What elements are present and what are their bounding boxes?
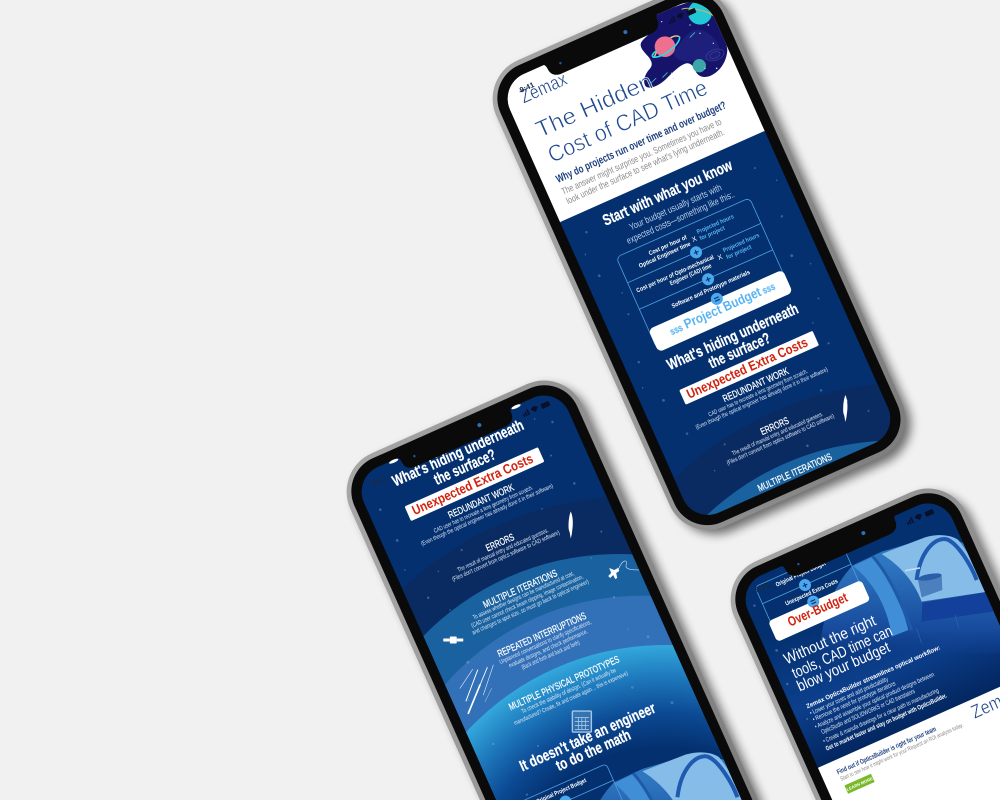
row 1: for project — [699, 225, 726, 242]
product list: • Analyze and assemble your optical product designs between — [814, 671, 936, 731]
galaxy swirl — [706, 48, 724, 62]
section: interruptions: REPEATED INTERRUPTIONS — [496, 611, 588, 660]
dome rib — [872, 556, 912, 630]
cylinder top — [917, 572, 942, 582]
camera lens — [861, 530, 866, 536]
tether — [618, 561, 640, 570]
white footer — [813, 675, 1000, 800]
icon: astronaut — [608, 561, 640, 579]
notch highlights — [388, 403, 521, 465]
meteors — [650, 33, 695, 84]
phone: right, over-budget screen — [717, 466, 1000, 800]
lower ribs — [917, 615, 959, 643]
stars — [369, 412, 713, 800]
phone bezel — [486, 0, 912, 537]
notch — [392, 404, 522, 474]
result panel — [648, 270, 793, 352]
result panel — [768, 580, 870, 642]
equals circle: = — [712, 294, 722, 306]
space blob illustration — [639, 1, 727, 88]
plus circle: + — [800, 580, 810, 592]
original budget: Original Project Budget — [775, 560, 827, 589]
band: errors — [674, 384, 890, 515]
clock: 9:41 — [518, 80, 536, 95]
screen — [508, 2, 890, 515]
budget box — [753, 546, 870, 642]
screen — [138, 288, 1000, 800]
row 1: Projected hours — [696, 213, 736, 236]
section: prototypes: MULTIPLE PHYSICAL PROTOTYPES — [507, 654, 622, 713]
sensor dot — [797, 563, 800, 566]
section: iterations: To assess whether designs can be manufactured at cost, — [472, 570, 575, 621]
section: errors — [719, 398, 835, 467]
pink planet — [655, 36, 675, 57]
section: interruptions — [494, 610, 598, 679]
divider 1 — [628, 223, 761, 283]
divider 2 — [639, 250, 773, 309]
heading: math — [517, 700, 664, 788]
stars — [751, 597, 822, 722]
start text — [627, 184, 735, 244]
camera lens — [477, 422, 482, 428]
plus circle 2: + — [704, 274, 714, 286]
sensor dot — [559, 62, 562, 65]
result label: $$$ — [669, 323, 685, 337]
phone case — [333, 367, 773, 800]
teal moon — [688, 1, 712, 25]
box outline — [616, 198, 790, 349]
product list: • Lower your costs and add predictability — [809, 676, 890, 717]
status icons — [668, 7, 697, 24]
phone shadow — [341, 372, 778, 800]
banner: extra costs: Unexpected Extra Costs — [684, 335, 810, 402]
start line 1: Your budget usually starts with — [628, 182, 724, 233]
telescope dome — [581, 752, 761, 800]
navy section — [560, 131, 890, 515]
white header — [492, 0, 770, 225]
phone: top, title screen — [492, 0, 918, 541]
section: errors — [444, 514, 561, 583]
band: iterations — [259, 467, 977, 800]
section: redundant work: REDUNDANT WORK — [447, 482, 516, 521]
dome panel — [853, 557, 908, 637]
divider — [762, 564, 851, 604]
icon: rocket — [569, 511, 573, 538]
section: iterations — [462, 558, 590, 637]
telescope cylinder — [918, 575, 942, 597]
heading: math: to do the math — [553, 727, 633, 775]
section: errors: The result of manual entry and educated guesses. — [456, 527, 550, 574]
title line 2: Cost of CAD Time — [544, 74, 711, 168]
phone shadow — [487, 0, 924, 548]
ring front — [652, 37, 680, 57]
phone bezel — [340, 374, 766, 800]
section: redundant work: CAD user has to recreate a lens geometry from scratch. — [707, 368, 809, 418]
result label: Project Budget — [682, 284, 764, 332]
section: prototypes: manufactured? Create, fix and create again… this is expensive) — [513, 670, 629, 727]
section: errors: ERRORS — [484, 532, 516, 554]
extra costs: Unexpected Extra Costs — [784, 578, 840, 607]
status icons — [906, 508, 935, 525]
equals circle — [709, 291, 725, 307]
blob stars — [639, 12, 717, 79]
section: redundant work — [413, 468, 554, 548]
moon ring — [682, 8, 713, 16]
zemax logo: Zemax — [517, 69, 571, 108]
row 1: X — [691, 235, 699, 244]
row 2: X — [717, 254, 724, 262]
product list: • Create & manufa drawings for a clear path to manufacturing — [822, 687, 940, 745]
heading: hiding: the surface? — [706, 330, 773, 372]
heading: blow budget — [781, 608, 901, 696]
dome base — [922, 592, 1000, 622]
banner: extra costs: Unexpected Extra Costs — [410, 451, 535, 518]
start line 2: expected costs—something like this:. — [625, 189, 736, 247]
ring back — [654, 36, 679, 57]
phone bezel — [724, 482, 1000, 800]
title — [534, 77, 707, 161]
box outline — [755, 547, 862, 629]
section: iterations: and changes to spot size, so must go back to optical engineer) — [471, 578, 590, 637]
row 2: Cost per hour of Opto-mechanical — [635, 254, 715, 294]
equals circle: = — [809, 596, 819, 609]
section: redundant work — [688, 351, 829, 431]
heading: blow budget: tools, CAD time can — [790, 623, 895, 682]
navy background — [730, 488, 1000, 775]
plus circle 2 — [702, 273, 714, 286]
screen — [727, 468, 1000, 800]
camera lens — [623, 29, 628, 35]
row 2: Projected hours — [722, 232, 761, 254]
dome arch — [917, 539, 977, 580]
heading: hiding — [390, 417, 533, 504]
dome body — [820, 535, 1000, 653]
math box — [516, 764, 631, 800]
icon: rocket — [843, 395, 847, 422]
row 3: Software and Prototype materials — [671, 269, 752, 310]
section: iterations: (CAD user cannot check beam clipping, image contamination, — [470, 573, 585, 630]
section: interruptions: evaluate designs, and check performance. — [508, 628, 589, 669]
section: interruptions: (Back and forth and back and forth) — [521, 639, 581, 671]
stars — [584, 167, 870, 472]
subheading: Why do projects run over time and over budget? — [554, 99, 728, 186]
heading: math: It doesn't take an engineer — [517, 700, 658, 775]
band: interruptions — [298, 513, 982, 800]
icon: calculator — [572, 711, 591, 732]
product list: OpticStudio and SOLIDWORKS or CAD translators — [820, 688, 916, 736]
section: errors: (Files don't convert from optics software to CAD software) — [726, 413, 835, 467]
section: redundant work: REDUNDANT WORK — [721, 366, 791, 405]
section: redundant work: (Even though the optical engineer has already done it in their software) — [420, 483, 554, 548]
sensor dot — [413, 455, 416, 458]
product list — [805, 645, 960, 753]
intro line 2: look under the surface to see what's lying underneath. — [565, 127, 726, 207]
intro text — [560, 117, 728, 207]
section: prototypes — [506, 654, 629, 727]
heading: blow budget: blow your budget — [794, 639, 893, 695]
section: errors: ERRORS — [759, 416, 791, 438]
row 1: Optical Engineer time — [638, 240, 692, 270]
budget formula box — [616, 197, 793, 352]
section: errors: The result of manual entry and educated guesses. — [731, 411, 824, 457]
intro line 1: The answer might surprise you. Sometimes you have to — [560, 117, 723, 198]
notch — [538, 11, 668, 81]
blob — [641, 2, 727, 88]
over budget: Over-Budget — [785, 590, 850, 629]
dome lit panel — [882, 535, 988, 602]
band: iterations — [707, 441, 878, 515]
plus circle 1 — [690, 246, 702, 258]
section: iterations: MULTIPLE ITERATIONS — [482, 568, 559, 611]
heading: hiding: the surface? — [431, 446, 499, 489]
row 1: Cost per hour of — [648, 234, 689, 257]
notch — [776, 512, 906, 582]
section: prototypes: To check the stability of design. (Can it actually be — [520, 667, 618, 715]
teal bubble — [693, 59, 706, 72]
footer cta text: Find out if OpticsBuilder is right for your team — [836, 726, 937, 776]
button: learn more: LEARN MORE — [846, 776, 874, 792]
row 2: Engineer (CAD) time — [669, 262, 713, 287]
phone: left, hidden costs screen — [134, 278, 1000, 800]
title line 1: The Hidden — [532, 68, 656, 142]
continuation of long page — [664, 296, 870, 508]
section: errors: (Files don't convert from optics software to CAD software) — [451, 529, 561, 583]
clock: 9:41 — [370, 474, 388, 488]
row 1 — [638, 215, 734, 268]
telescope dome — [820, 535, 1000, 653]
rail — [905, 568, 920, 571]
section: redundant work: (Even though the optical engineer has already done it in their software) — [695, 366, 829, 431]
heading: hiding: What's hiding underneath — [390, 417, 526, 490]
status icons — [522, 400, 551, 417]
heading: start: Start with what you know — [600, 157, 736, 230]
blob cloud — [673, 30, 721, 61]
product list: • Remove the need for prototype iterations — [812, 680, 897, 723]
result label: $$$ — [761, 282, 777, 296]
clock: 9:41 — [754, 580, 771, 595]
heading: hiding — [664, 301, 807, 388]
band: prototypes — [308, 559, 1000, 800]
row 2 — [636, 234, 760, 292]
phone case — [479, 0, 919, 543]
product list: Get to market faster and stay on budget with OpticsBuilder. — [825, 692, 948, 753]
phone case — [717, 475, 1000, 800]
plus circle 1: + — [692, 247, 702, 259]
navy background — [346, 380, 759, 800]
section: interruptions: Unplanned conversations to clarify specifications, — [498, 619, 593, 666]
section heading: iterations: MULTIPLE ITERATIONS — [756, 452, 834, 494]
icon: satellite — [443, 637, 463, 644]
band: errors — [182, 385, 1000, 800]
heading: hiding: What's hiding underneath — [664, 301, 801, 374]
row 2: for project — [725, 244, 753, 261]
product list: Zemax OpticsBuilder streamlines optical workflow: — [805, 645, 942, 710]
icon: meteor streaks — [460, 665, 493, 713]
section: redundant work: CAD user has to recreate a lens geometry from scratch. — [433, 484, 534, 535]
phone shadow — [725, 480, 1000, 800]
heading: blow budget: Without the right — [781, 612, 879, 668]
